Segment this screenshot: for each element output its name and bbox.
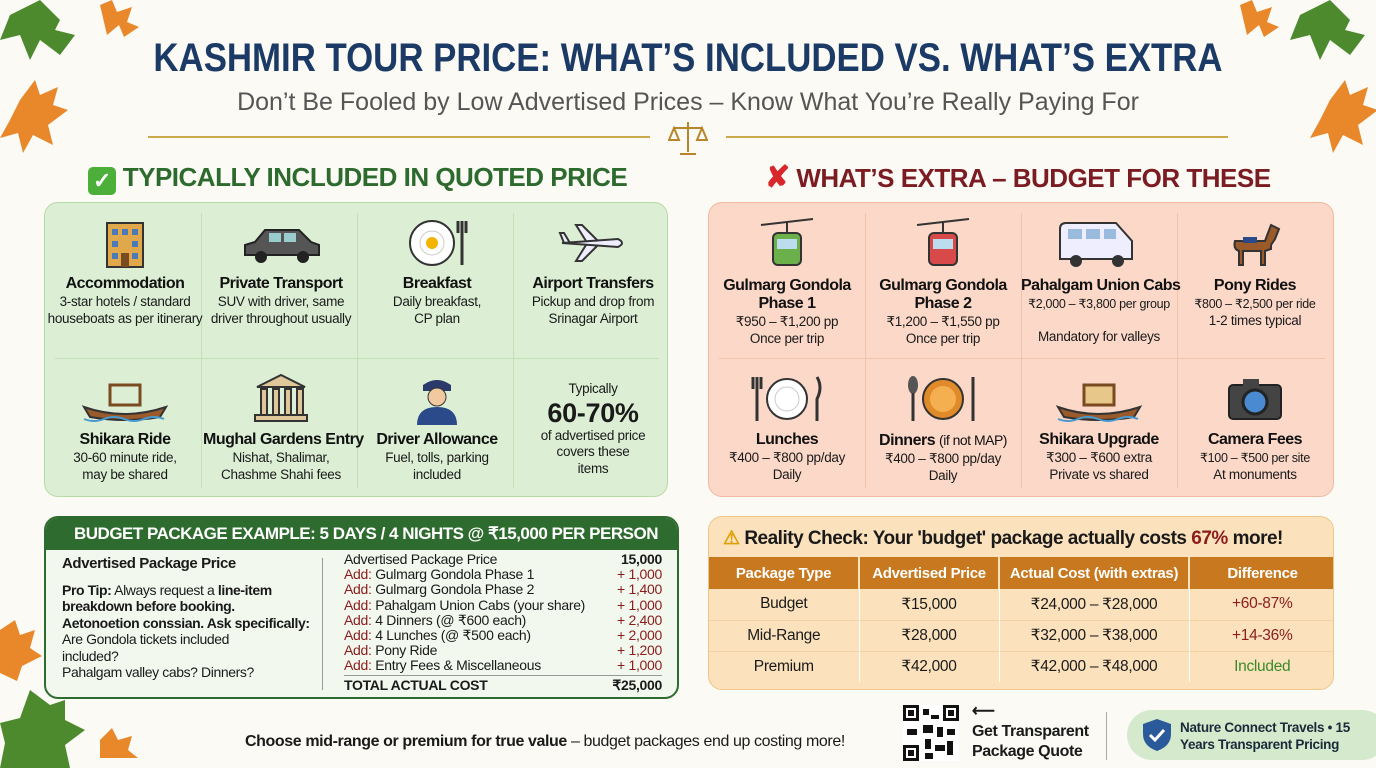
item: gondola 1: Once per trip xyxy=(750,330,824,346)
heading: included: ✓ xyxy=(93,168,111,193)
comparison table: ₹42,000 – ₹48,000 xyxy=(1031,658,1157,675)
item: camera: Camera Fees xyxy=(1208,431,1302,448)
item: dinners: Dinners (if not MAP) xyxy=(879,432,1007,449)
item: accommodation xyxy=(48,222,203,326)
item: breakfast: Daily breakfast, xyxy=(393,294,481,309)
item: union cabs: ₹2,000 – ₹3,800 per group xyxy=(1028,297,1170,311)
item: mughal gardens: Chashme Shahi fees xyxy=(221,466,341,482)
header: BUDGET PACKAGE EXAMPLE: 5 DAYS / 4 NIGHTS @ ₹15,000 PER PERSON xyxy=(74,524,658,543)
item: pony: 1-2 times typical xyxy=(1209,312,1301,328)
comparison table: Premium xyxy=(754,658,814,675)
item: gondola 2 xyxy=(879,218,1008,346)
item: mughal gardens xyxy=(203,374,364,482)
header xyxy=(46,518,677,550)
quote call to action: Package Quote xyxy=(972,743,1082,760)
item: breakfast xyxy=(393,220,481,326)
item: gondola 1: Phase 1 xyxy=(758,295,815,312)
comparison table: Difference xyxy=(1227,564,1298,582)
item: accommodation: 3-star hotels / standard houseboats as per itinerary xyxy=(48,294,202,326)
line items: Add: 4 Lunches (@ ₹500 each) xyxy=(344,627,531,643)
item: breakfast: Breakfast xyxy=(403,275,471,292)
item: shikara: may be shared xyxy=(82,466,168,482)
item: driver allowance: Fuel, tolls, parking xyxy=(385,450,489,465)
item: shikara upgrade: Private vs shared xyxy=(1049,466,1149,482)
badge: Nature Connect Travels xyxy=(1127,710,1376,760)
comparison table xyxy=(709,557,1333,682)
pro tip text: included? xyxy=(62,648,118,664)
comparison table: ₹42,000 xyxy=(901,658,957,675)
footer message: Choose mid-range or premium for true value – budget packages end up costing more! xyxy=(245,733,845,750)
comparison table: +60-87% xyxy=(1232,595,1292,612)
comparison table: Mid-Range xyxy=(747,626,820,644)
item: mughal gardens: Mughal Gardens Entry xyxy=(203,431,364,448)
panel: included xyxy=(44,202,668,497)
line items: TOTAL ACTUAL COST xyxy=(344,677,487,693)
comparison table: ₹24,000 – ₹28,000 xyxy=(1031,596,1157,613)
item: gondola 1: ₹950 – ₹1,200 pp xyxy=(736,314,838,329)
item: airport transfers: Airport Transfers xyxy=(532,275,654,292)
line items: Add: Gulmarg Gondola Phase 1 xyxy=(344,566,534,582)
item: dinners xyxy=(879,376,1007,483)
quote call to action: Get Transparent xyxy=(972,723,1089,740)
line items: + 2,000 xyxy=(617,627,662,643)
item: private transport: Private Transport xyxy=(219,275,343,292)
panel: budget package example xyxy=(44,516,679,699)
line items: 15,000 xyxy=(621,551,662,567)
comparison table: Budget xyxy=(760,595,807,612)
item: typically 60-70% xyxy=(541,381,645,476)
line items: Add: Pony Ride xyxy=(344,642,437,658)
pro tip text: Pro Tip: Always request a line-item xyxy=(62,582,272,598)
comparison table: Included xyxy=(1234,658,1290,675)
pro tip text: Advertised Package Price xyxy=(62,555,236,572)
item: dinners: Daily xyxy=(929,468,957,482)
item: driver allowance: Driver Allowance xyxy=(376,431,498,448)
pro tip text: Are Gondola tickets included xyxy=(62,631,229,647)
quote call to action: ⟵ xyxy=(972,703,995,720)
item: typically 60-70%: 60-70% xyxy=(547,398,639,428)
icon: scales xyxy=(668,122,708,155)
line items: ₹25,000 xyxy=(612,677,662,693)
item: private transport xyxy=(211,229,352,326)
reality check heading: ⚠ Reality Check: Your 'budget' package actually costs 67% more! xyxy=(723,528,1283,549)
comparison table: Advertised Price xyxy=(872,564,986,582)
line items: + 1,400 xyxy=(617,581,662,597)
item: dinners: ₹400 – ₹800 pp/day xyxy=(885,451,1001,466)
item: pony: Pony Rides xyxy=(1214,277,1296,294)
comparison table: Package Type xyxy=(736,564,831,582)
item: typically 60-70%: Typically of advertised price xyxy=(541,381,645,442)
comparison table: ₹15,000 xyxy=(901,596,957,613)
panel: reality check xyxy=(708,516,1334,690)
item: gondola 1: Gulmarg Gondola xyxy=(723,277,851,294)
line items: Add: Pahalgam Union Cabs (your share) xyxy=(344,597,585,613)
line items xyxy=(344,551,662,693)
item: pony: ₹800 – ₹2,500 per ride xyxy=(1194,297,1316,311)
item: camera: At monuments xyxy=(1213,466,1297,482)
item: gondola 2: Once per trip xyxy=(906,330,980,346)
item: union cabs xyxy=(1021,222,1180,344)
title: KASHMIR TOUR PRICE: WHAT’S INCLUDED VS. WHAT’S EXTRA xyxy=(153,36,1223,80)
heading: extra: ✘ WHAT’S EXTRA – BUDGET FOR THESE xyxy=(765,161,1271,194)
item: typically 60-70%: covers these xyxy=(557,444,629,459)
item: gondola 2: Gulmarg Gondola xyxy=(879,277,1007,294)
icon: QR code xyxy=(903,705,959,761)
item: private transport: SUV with driver, same driver throughout usually xyxy=(211,294,351,326)
item: lunches: Daily xyxy=(773,466,801,482)
line items: + 1,000 xyxy=(617,597,662,613)
item: shikara upgrade: Shikara Upgrade xyxy=(1039,431,1159,448)
quote call to action xyxy=(972,703,1089,760)
item: accommodation: Accommodation xyxy=(66,275,184,292)
line items: Add: Entry Fees & Miscellaneous xyxy=(344,657,541,673)
item: gondola 2: ₹1,200 – ₹1,550 pp xyxy=(886,314,1000,329)
item: shikara upgrade: ₹300 – ₹600 extra xyxy=(1046,450,1152,465)
pro tip text xyxy=(62,555,310,680)
line items: Add: Gulmarg Gondola Phase 2 xyxy=(344,581,534,597)
item: driver allowance xyxy=(376,380,498,482)
line items: + 1,200 xyxy=(617,642,662,658)
item: camera: ₹100 – ₹500 per site xyxy=(1200,451,1310,465)
item: lunches xyxy=(729,376,846,482)
line items: + 1,000 xyxy=(617,566,662,582)
item: gondola 1 xyxy=(723,218,852,346)
item: lunches: Lunches xyxy=(756,431,818,448)
badge: Nature Connect Travels: Nature Connect Travels • 15 xyxy=(1180,720,1350,735)
item: pony xyxy=(1194,224,1316,328)
item: union cabs: Mandatory for valleys xyxy=(1038,329,1160,344)
item: lunches: ₹400 – ₹800 pp/day xyxy=(729,450,845,465)
item: typically 60-70%: items xyxy=(578,460,608,476)
item: shikara: 30-60 minute ride, xyxy=(73,450,177,465)
item: gondola 2: Phase 2 xyxy=(914,295,971,312)
item: airport transfers xyxy=(532,224,654,326)
item: union cabs: Pahalgam Union Cabs xyxy=(1021,277,1180,294)
pro tip text: Aetonoetion conssian. Ask specifically: xyxy=(62,614,310,630)
heading: included: TYPICALLY INCLUDED IN QUOTED PRICE xyxy=(123,162,627,192)
item: shikara xyxy=(73,384,177,482)
item: airport transfers: Pickup and drop from Srinagar Airport xyxy=(532,294,654,326)
comparison table: ₹32,000 – ₹38,000 xyxy=(1031,627,1157,644)
comparison table: ₹28,000 xyxy=(901,627,957,644)
line items: Advertised Package Price xyxy=(344,551,497,567)
pro tip text: Pahalgam valley cabs? Dinners? xyxy=(62,664,254,680)
comparison table: Actual Cost (with extras) xyxy=(1010,564,1178,582)
line items: + 1,000 xyxy=(617,657,662,673)
pro tip text: breakdown before booking. xyxy=(62,598,235,614)
item: shikara upgrade xyxy=(1039,384,1159,482)
item: camera xyxy=(1200,379,1310,482)
item: breakfast: CP plan xyxy=(414,310,460,326)
badge: Nature Connect Travels: Years Transparent Pricing xyxy=(1180,737,1339,752)
item: driver allowance: included xyxy=(413,466,461,482)
subtitle: Don’t Be Fooled by Low Advertised Prices – Know What You’re Really Paying For xyxy=(237,88,1139,116)
comparison table: +14-36% xyxy=(1232,626,1292,644)
line items: + 2,400 xyxy=(617,612,662,628)
panel: extras xyxy=(708,202,1334,497)
item: mughal gardens: Nishat, Shalimar, xyxy=(233,450,329,465)
line items: Add: 4 Dinners (@ ₹600 each) xyxy=(344,612,526,628)
item: shikara: Shikara Ride xyxy=(80,431,170,448)
